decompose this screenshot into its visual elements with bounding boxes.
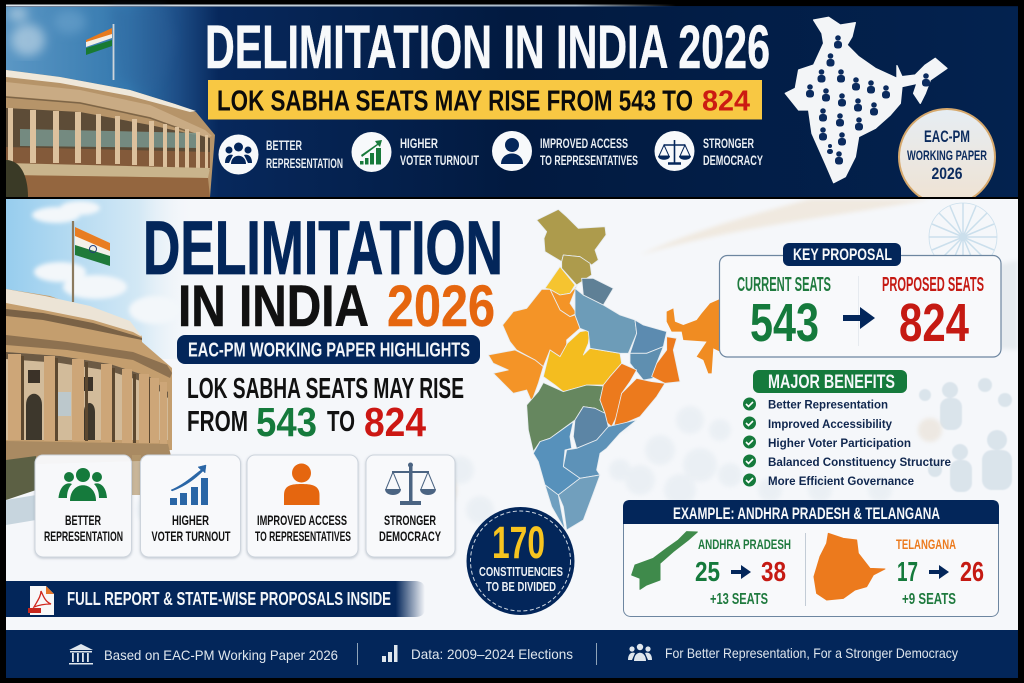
- top benefit: stronger democracy: [654, 131, 763, 171]
- highlights pill: EAC-PM WORKING PAPER HIGHLIGHTS: [188, 340, 470, 362]
- main panel background: [6, 199, 1018, 630]
- main parliament building: [6, 289, 172, 525]
- major benefits: [743, 370, 951, 488]
- card: higher voter turnout: VOTER TURNOUT: [152, 528, 231, 544]
- top benefit: higher voter turnout: VOTER TURNOUT: [400, 153, 480, 168]
- example panel: 38: [761, 556, 786, 587]
- card: improved access: TO REPRESENTATIVES: [255, 528, 351, 544]
- main title: DELIMITATION: [143, 206, 503, 291]
- card: improved access: IMPROVED ACCESS: [257, 512, 347, 528]
- 170 constituencies circle: [466, 507, 574, 615]
- top benefit: stronger democracy: DEMOCRACY: [703, 153, 763, 168]
- key proposal pill: [783, 243, 901, 266]
- top benefit: improved access: IMPROVED ACCESS: [540, 136, 628, 151]
- card: improved access: [247, 455, 358, 557]
- headline text: LOK SABHA SEATS MAY RISE: [187, 373, 464, 405]
- EAC-PM badge: WORKING PAPER: [907, 147, 987, 163]
- highlights pill: [177, 335, 480, 364]
- footer bar: [6, 630, 1018, 678]
- label: Telangana: TELANGANA: [896, 536, 956, 552]
- card: better representation: REPRESENTATION: [44, 528, 123, 544]
- report banner: FULL REPORT & STATE-WISE PROPOSALS INSIDE: [67, 589, 391, 609]
- label: Andhra Pradesh: ANDHRA PRADESH: [698, 536, 791, 552]
- headline text: 824: [364, 399, 426, 445]
- footer icon: bars: [382, 645, 398, 662]
- top benefit: improved access: [492, 131, 638, 171]
- example panel: [623, 500, 999, 616]
- 170 constituencies circle: CONSTITUENCIES: [479, 565, 563, 579]
- card: stronger democracy: DEMOCRACY: [379, 528, 441, 544]
- main title: IN INDIA: [178, 274, 369, 339]
- top title: DELIMITATION IN INDIA 2026: [205, 13, 770, 81]
- top benefit: better representation: BETTER: [266, 138, 302, 153]
- crowd watermark: [136, 406, 892, 524]
- 170 constituencies circle: TO BE DIVIDED: [486, 580, 556, 594]
- map: Andhra Pradesh: [632, 532, 697, 589]
- footer bar: For Better Representation, For a Stronger Democracy: [665, 645, 958, 661]
- card: better representation: BETTER: [65, 512, 101, 528]
- top flag: [86, 24, 114, 80]
- top India map with people icons: [785, 17, 947, 183]
- key proposal panel: 543: [750, 293, 819, 353]
- benefits list: Better Representation: [768, 398, 888, 412]
- top benefit: higher voter turnout: HIGHER: [400, 136, 438, 151]
- card: better representation: [35, 455, 132, 557]
- top benefit: improved access: TO REPRESENTATIVES: [540, 153, 638, 168]
- footer bar: Based on EAC-PM Working Paper 2026: [104, 647, 338, 663]
- card: stronger democracy: STRONGER: [384, 512, 436, 528]
- EAC-PM badge: 2026: [932, 164, 962, 183]
- key proposal panel: [720, 243, 1001, 357]
- key proposal panel: CURRENT SEATS: [737, 274, 831, 296]
- report banner: [6, 581, 425, 617]
- map: Telangana: [814, 533, 885, 600]
- benefits list: More Efficient Governance: [768, 474, 914, 488]
- main title: [143, 206, 503, 339]
- card: higher voter turnout: HIGHER: [172, 512, 209, 528]
- benefits list: Improved Accessibility: [768, 417, 892, 431]
- benefits list: Higher Voter Participation: [768, 436, 911, 450]
- top yellow headline bar: 824: [702, 86, 750, 118]
- tricolor swoosh: [640, 199, 1018, 350]
- headline text: [187, 373, 464, 445]
- top benefit: stronger democracy: STRONGER: [703, 136, 754, 151]
- card: stronger democracy: [366, 455, 455, 557]
- top banner panel: [6, 4, 1018, 205]
- major benefits pill: MAJOR BENEFITS: [768, 372, 895, 393]
- EAC-PM badge: EAC-PM: [924, 127, 970, 146]
- key proposal pill: KEY PROPOSAL: [793, 245, 892, 264]
- example panel: 26: [960, 556, 984, 587]
- main flag: [73, 221, 110, 302]
- benefits list: [743, 398, 951, 488]
- footer bar: Data: 2009–2024 Elections: [411, 646, 573, 662]
- footer icon: institution: [69, 644, 93, 664]
- headline text: 543: [256, 399, 317, 445]
- main title: 2026: [387, 274, 495, 339]
- top yellow headline bar: LOK SABHA SEATS MAY RISE FROM 543 TO: [217, 86, 693, 118]
- icon: pdf file: [28, 586, 54, 615]
- top benefit: better representation: REPRESENTATION: [266, 156, 343, 171]
- EAC-PM badge: [899, 109, 995, 205]
- benefits list: Balanced Constituency Structure: [768, 455, 951, 469]
- example panel: 17: [897, 556, 918, 587]
- top benefit: higher voter turnout: [352, 132, 480, 172]
- headline text: FROM: [187, 406, 248, 438]
- example panel: +13 SEATS: [710, 591, 768, 608]
- headline text: TO: [327, 406, 355, 438]
- top benefit: better representation: [218, 134, 343, 174]
- example panel: 25: [695, 556, 720, 587]
- top parliament building: [6, 70, 215, 197]
- main India map: [488, 209, 720, 530]
- Ashoka chakra watermark: [928, 202, 998, 255]
- key proposal panel: 824: [899, 293, 969, 353]
- arrow: [843, 307, 875, 329]
- card: higher voter turnout: [140, 455, 240, 557]
- footer icon: people: [628, 644, 652, 661]
- example panel: +9 SEATS: [902, 591, 956, 608]
- 170 constituencies circle: 170: [492, 517, 545, 568]
